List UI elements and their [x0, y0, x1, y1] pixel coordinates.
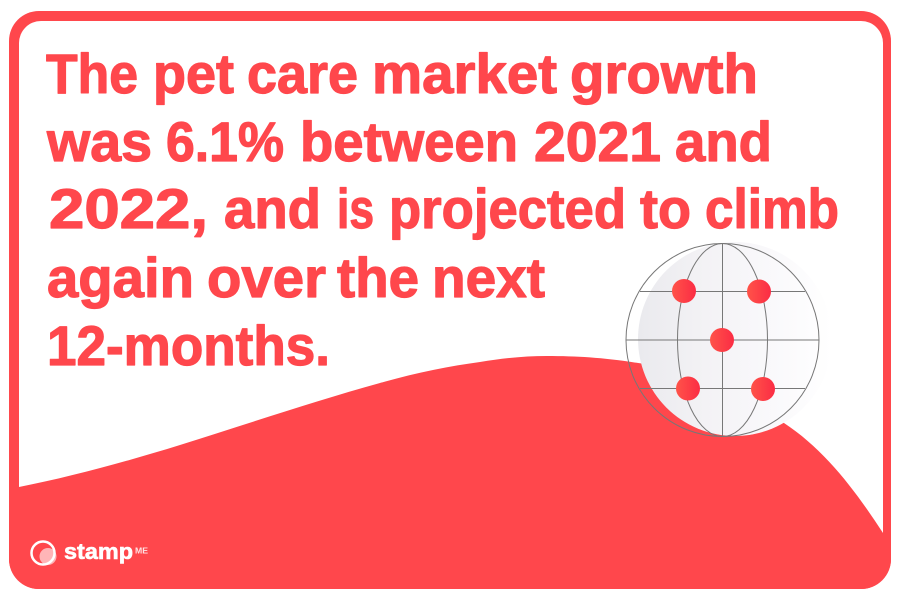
headline: again	[47, 246, 194, 309]
headline: climb	[705, 177, 839, 240]
red hill	[9, 356, 891, 589]
headline: pet	[153, 42, 234, 105]
headline: 2021	[534, 110, 661, 173]
headline: 6.1%	[166, 110, 284, 173]
headline: market	[372, 42, 557, 105]
logo: stampME	[32, 539, 148, 565]
headline: was	[46, 110, 152, 173]
headline: 12-months.	[47, 314, 330, 377]
icon: globe with location dots	[626, 242, 832, 436]
headline: The	[46, 42, 138, 105]
headline	[46, 42, 839, 377]
logo: stampME: stamp	[64, 539, 133, 564]
headline: care	[247, 42, 358, 105]
headline: is	[337, 177, 374, 240]
headline: projected	[389, 177, 626, 240]
headline: next	[432, 246, 545, 309]
headline: between	[300, 110, 518, 173]
headline: 2022,	[49, 177, 208, 240]
headline: over	[207, 246, 326, 309]
headline: and	[675, 110, 772, 173]
headline: and	[224, 177, 321, 240]
headline: growth	[570, 42, 758, 105]
headline: the	[337, 246, 419, 309]
logo: stampME: ME	[135, 546, 148, 556]
headline: to	[640, 177, 691, 240]
